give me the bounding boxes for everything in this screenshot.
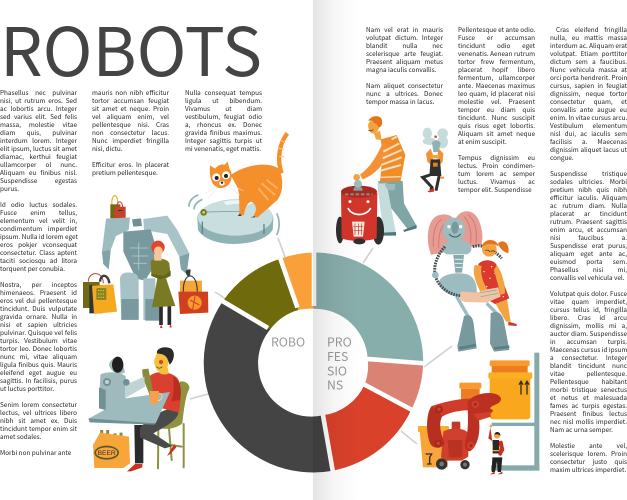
segment: teal: [314, 252, 423, 363]
text column: right 2: [458, 25, 535, 194]
text column: right 3: scelerisque lorem. Proin: [550, 449, 627, 458]
text column: right 2: tincidunt. Nunc suscipit: [458, 113, 535, 122]
text column: left 1: eros vel dui pellentesque: [0, 296, 77, 305]
text column: right 1: tempor massa in lacus.: [366, 97, 434, 106]
text column: right 3: aliquam eget ante ac,: [550, 249, 627, 258]
table: [88, 392, 170, 425]
text column: right 1: scelerisque arte feugiat.: [366, 49, 443, 58]
text column: right 3: facilisis a. Maecenas: [550, 137, 627, 146]
text column: right 2: Aliquam sit amet neque: [458, 129, 535, 138]
text column: right 3: volutpat. Etiam porttitor: [550, 49, 627, 58]
text column: left 2: non consectetur lacus.: [92, 128, 169, 137]
text column: right 3: in accumsan turpis.: [550, 337, 627, 346]
text column: right 3: nisi faucibus a.: [550, 233, 627, 242]
text column: right 2: tortor frew fermentum,: [458, 57, 535, 66]
text column: left 3: Integer sagittis turpis ut: [185, 136, 262, 145]
text column: right 3: dignissim aliquet lacus ut: [550, 145, 627, 154]
text column: right 3: auctor diam. Suspendisse: [550, 329, 627, 338]
text column: right 2: lectus. Proin condimen-: [458, 161, 535, 170]
shopping bags right: [178, 269, 208, 314]
text column: left 1: diamac, kerthui feugiat: [0, 152, 77, 161]
text column: right 2: leo quam, id placerat nisi: [458, 89, 535, 98]
text column: left 1: gravida ornare. Nulla in: [0, 312, 77, 321]
text column: right 3: Volutpat quis dolor. Fusce: [550, 289, 627, 298]
text column: left 2: pellentesque nisi. Cras: [92, 120, 169, 129]
text column: left 1: lectus, vel ultrices libero: [0, 408, 77, 417]
text column: left 1: tincidunt tempor enim sit: [0, 424, 77, 433]
text column: left 1: consectetur. Class aptent: [0, 248, 77, 257]
text column: right 2: molestie vel. Praesent: [458, 97, 535, 106]
text column: left 1: Fusce enim tellus,: [0, 208, 77, 217]
text column: left 1: Senim lorem consectetur: [0, 400, 77, 409]
donut label: ROBO: [271, 333, 305, 351]
text column: left 2: Efficitur eros. In placerat: [92, 160, 169, 169]
red robot: [427, 393, 501, 470]
text column: right 1: magna iaculis convallis.: [366, 65, 436, 74]
text column: left 1: Nostra, per inceptos: [0, 280, 77, 289]
donut label: SIO: [327, 361, 347, 379]
text column: left 1: [0, 88, 78, 457]
connector lines: [190, 238, 452, 444]
text column: left 1: ligula finibus quis. Mauris: [0, 360, 77, 369]
segment: red: [323, 385, 411, 471]
text column: right 2: ante. Maecenas maximus: [458, 81, 535, 90]
robot vacuum: [189, 195, 279, 244]
text column: left 1: taciti sociosqu ad litora: [0, 256, 77, 265]
text column: left 1: tortor leo. Donec lobortis: [0, 344, 77, 353]
illustration: cat on robot vacuum: [189, 133, 287, 244]
text column: right 3: vitae quam imperdiet,: [550, 297, 627, 306]
text column: left 1: sagittis. In facilisis, purus: [0, 376, 77, 385]
text column: left 2: vel aliquam enim, vel: [92, 112, 169, 121]
text column: right 3: vitae pellentesque.: [550, 369, 627, 378]
cat: [205, 133, 287, 218]
text column: left 1: condimentum imperdiet: [0, 224, 77, 233]
text column: right 3: enim arcu, et accumsan: [550, 225, 627, 234]
text column: left 1: Phasellus nec pulvinar: [0, 88, 77, 97]
text column: left 1: Id odio luctus sodales.: [0, 200, 77, 209]
text column: left 1: elit ipsum, luctus sit amet: [0, 144, 77, 153]
text column: left 1: Suspendisse egestas: [0, 176, 77, 185]
text column: right 3: congue.: [550, 153, 574, 162]
text column: left 3: [185, 88, 262, 153]
small box: [418, 426, 449, 467]
text column: right 1: volutpat dictum. Integer: [366, 33, 443, 42]
text column: right 2: tincidunt odio eget: [458, 41, 535, 50]
robot: [102, 216, 189, 321]
text column: right 2: fermentum, ullamcorper: [458, 73, 535, 82]
text column: right 3: Phasellus nisi mi,: [550, 265, 627, 274]
worker: [488, 425, 504, 474]
text column: left 1: eros pokjer vconsequat: [0, 240, 77, 249]
text column: right 3: et netus et malesuada: [550, 393, 627, 402]
page fold shadow: [313, 0, 359, 500]
chair: [158, 381, 189, 468]
text column: left 1: interdum lorem. Integer: [0, 136, 77, 145]
illustration: robot and man at a table with beer: [88, 347, 189, 471]
text column: right 3: maxim ultrices imperdiet.: [550, 465, 626, 474]
text column: right 1: blandit nulla nec: [366, 41, 443, 50]
text column: right 2: Pellentesque et ante odio.: [458, 25, 535, 34]
text column: left 3: a, rhoncus ex. Donec: [185, 120, 262, 129]
text column: right 2: tempor elit. Suspendisse: [458, 185, 532, 194]
text column: right 3: Nam ac urna semper.: [550, 425, 613, 434]
text column: left 3: ligula ut bibendum.: [185, 96, 262, 105]
text column: right 3: nulla, eu mattis massa: [550, 33, 627, 42]
text column: right 2: quis risus eget lobortis.: [458, 121, 535, 130]
text column: right 2: at enim suscipit.: [458, 137, 507, 146]
text column: left 3: Nulla consequat tempus: [185, 88, 262, 97]
text column: right 2: Fusce er accumsan: [458, 33, 535, 42]
text column: right 2: venenatis. Aenean rutrum: [458, 49, 535, 58]
text column: left 2: tortor accumsan feugiat: [92, 96, 169, 105]
beer crate: BEER: [98, 450, 116, 457]
text column: right 3: a consectetur. Integer: [550, 353, 627, 362]
text column: right 3: interdum ac. Aliquam erat: [550, 41, 627, 50]
text column: left 1: sed varius elit. Sed felis: [0, 112, 77, 121]
girl: [493, 297, 511, 322]
text column: left 1: nisi, ut rutrum eros. Sed: [0, 96, 77, 105]
man: [353, 116, 417, 236]
text column: right 3: Pellentesque habitant: [550, 377, 627, 386]
text column: right 3: orci porta hendrerit. Proin: [550, 73, 627, 82]
text column: right 3: efficitur iaculis. Aliquam: [550, 193, 627, 202]
text column: right 3: nec nisl mollis imperdiet.: [550, 417, 627, 426]
illustration: man with red trash robot: [336, 116, 517, 352]
donut label: NS: [327, 376, 343, 394]
text column: right 3: cursus tellus id, fringilla: [550, 305, 627, 314]
text column: left 2: nisi, dictu.: [92, 144, 123, 153]
text column: right 3: Maecenas cursus id ipsum: [550, 345, 627, 354]
segment: dark grey: [204, 301, 333, 472]
text column: right 1: Praesent aliquam metus: [366, 57, 443, 66]
donut chart: [204, 250, 426, 474]
text column: left 1: torquent per conubia.: [0, 264, 65, 273]
text column: left 1: ac lobortis arcu. Integer: [0, 104, 77, 113]
text column: left 3: mi venenatis, eget mattis.: [185, 144, 261, 153]
text column: right 3: Cras eleifend fringilla: [556, 25, 627, 34]
text column: right 3: dictum sem a faucibus.: [550, 57, 627, 66]
large box: [488, 360, 532, 419]
text column: right 3: blandit tincidunt nunc: [550, 361, 627, 370]
robot with girl reading: [428, 211, 517, 352]
text column: right 2: luctus. Vivamus ac: [458, 177, 535, 186]
text column: left 3: gravida finibus maximus.: [185, 128, 262, 137]
robot hair: [428, 211, 482, 255]
text column: left 2: mauris non nibh efficitur: [92, 88, 169, 97]
text column: right 1: Nam vel erat in mauris: [366, 25, 443, 34]
text column: right 3: convallis vel vehicula vel.: [550, 273, 624, 282]
shelf: [491, 353, 539, 471]
beer mug: [149, 391, 162, 404]
text column: right 3: Suspendisse tristique: [550, 169, 627, 178]
text column: right 3: consectetur quam, et: [550, 97, 627, 106]
text column: left 2: [92, 88, 169, 177]
title: ROBOTS: [0, 0, 262, 96]
text column: left 1: nunc mi, vitae aliquam: [0, 352, 77, 361]
text column: right 3: placerat ar tincidunt: [550, 209, 627, 218]
text column: right 1: Nam aliquet consectetur: [366, 81, 443, 90]
text column: left 1: eleifend eget augue eu: [0, 368, 77, 377]
donut label: [271, 333, 352, 394]
text column: left 1: pulvinar. Quisque vel felis: [0, 328, 77, 337]
text column: left 3: vestibulum, feugiat odio: [185, 112, 262, 121]
woman: [151, 241, 175, 328]
text column: right 3: dignissim, neque tortor: [550, 89, 627, 98]
illustration: red robot moving boxes: [418, 353, 539, 474]
segment: olive: [223, 259, 298, 329]
text column: right 3: Praesent finibus lectus: [550, 409, 627, 418]
text column: left 3: Vivamus ut diam: [185, 104, 262, 113]
text column: left 1: Morbi non pulvinar ante: [0, 448, 71, 457]
text column: right 3: enim. In vitae cursus arcu.: [550, 113, 627, 122]
text column: left 1: Aliquam eu finibus nisl.: [0, 168, 77, 177]
text column: right 3: consectetur justo quis: [550, 457, 627, 466]
text column: right 3: nisl dui, ac iaculis sem: [550, 129, 627, 138]
text column: left 1: ullamcorper ol nunc.: [0, 160, 77, 169]
man: [127, 347, 181, 471]
middle box: [459, 383, 481, 401]
text column: right 3: Nunc vehicula massa at: [550, 65, 627, 74]
text column: left 1: nisi et sapien ultricies: [0, 320, 77, 329]
robot at table: [99, 357, 145, 410]
text column: left 1: nibh sit amet ex. Duis: [0, 416, 77, 425]
text column: right 3: convallis ante augue eu: [550, 105, 627, 114]
text column: right 3: fames ac turpis egestas.: [550, 401, 627, 410]
text column: right 3: dignissim, mollis mi a,: [550, 321, 627, 330]
illustration: big robot with woman and shopping bags: [83, 196, 208, 328]
text column: right 2: placerat hopif libero: [458, 65, 535, 74]
text column: right 3: pretium nibh quis nibh: [550, 185, 627, 194]
text column: right 3: rutrum. Praesent sagittis: [550, 217, 627, 226]
text column: right 3: Suspendisse erat purus,: [550, 241, 627, 250]
text column: right 1: nunc a ultrices. Donec: [366, 89, 443, 98]
text column: left 1: tincidunt. Duis vulputate: [0, 304, 77, 313]
text column: right 2: tempor eu diam quis: [458, 105, 535, 114]
text column: left 2: Nunc imperdiet fringilla: [92, 136, 169, 145]
robot body: [442, 240, 471, 254]
text column: right 3: Molestie ante vel,: [550, 441, 627, 450]
text column: right 2: tum lorem ac semper: [458, 169, 535, 178]
donut label: PRO: [327, 333, 352, 351]
text column: left 1: purus.: [0, 184, 19, 193]
text column: right 1: [366, 25, 443, 106]
text column: right 3: ac rutrum diam. Nulla: [550, 201, 627, 210]
text column: right 3: morbi tristique senectus: [550, 385, 627, 394]
text column: left 1: diam quis, pulvinar: [0, 128, 77, 137]
text column: left 1: ut luctus porttitor.: [0, 384, 54, 393]
text column: left 2: sit amet et neque. Proin: [92, 104, 169, 113]
text column: right 2: Tempus dignissim eu: [458, 153, 535, 162]
text column: left 1: amet sodales.: [0, 432, 41, 441]
text column: left 1: turpis. Vestibulum vitae: [0, 336, 77, 345]
text column: left 2: pretium pellentesque.: [92, 168, 158, 177]
text column: left 1: elementum vel velit in,: [0, 216, 77, 225]
text column: right 3: libero. Cras id arcu: [550, 313, 627, 322]
bag on robot shoulder: [110, 196, 126, 218]
text column: right 3: [550, 25, 627, 474]
red trash robot: [336, 180, 384, 245]
shopping bags left: [83, 274, 117, 314]
text column: left 1: himenaeos. Praesent id: [0, 288, 77, 297]
segment: pink: [364, 359, 423, 410]
donut label: FES: [327, 347, 348, 365]
drone man: [423, 128, 448, 192]
text column: right 3: Vestibulum elementum: [550, 121, 627, 130]
text column: right 3: cursus, sapien in feugiat: [550, 81, 627, 90]
text column: left 1: massa, molestie vitae: [0, 120, 77, 129]
text column: right 3: euismod porta sem.: [550, 257, 627, 266]
text column: right 3: sodales ultricies. Morbi: [550, 177, 627, 186]
text column: left 1: ipsum. Nulla id lorem eget: [0, 232, 78, 241]
segment: orange: [280, 252, 314, 310]
